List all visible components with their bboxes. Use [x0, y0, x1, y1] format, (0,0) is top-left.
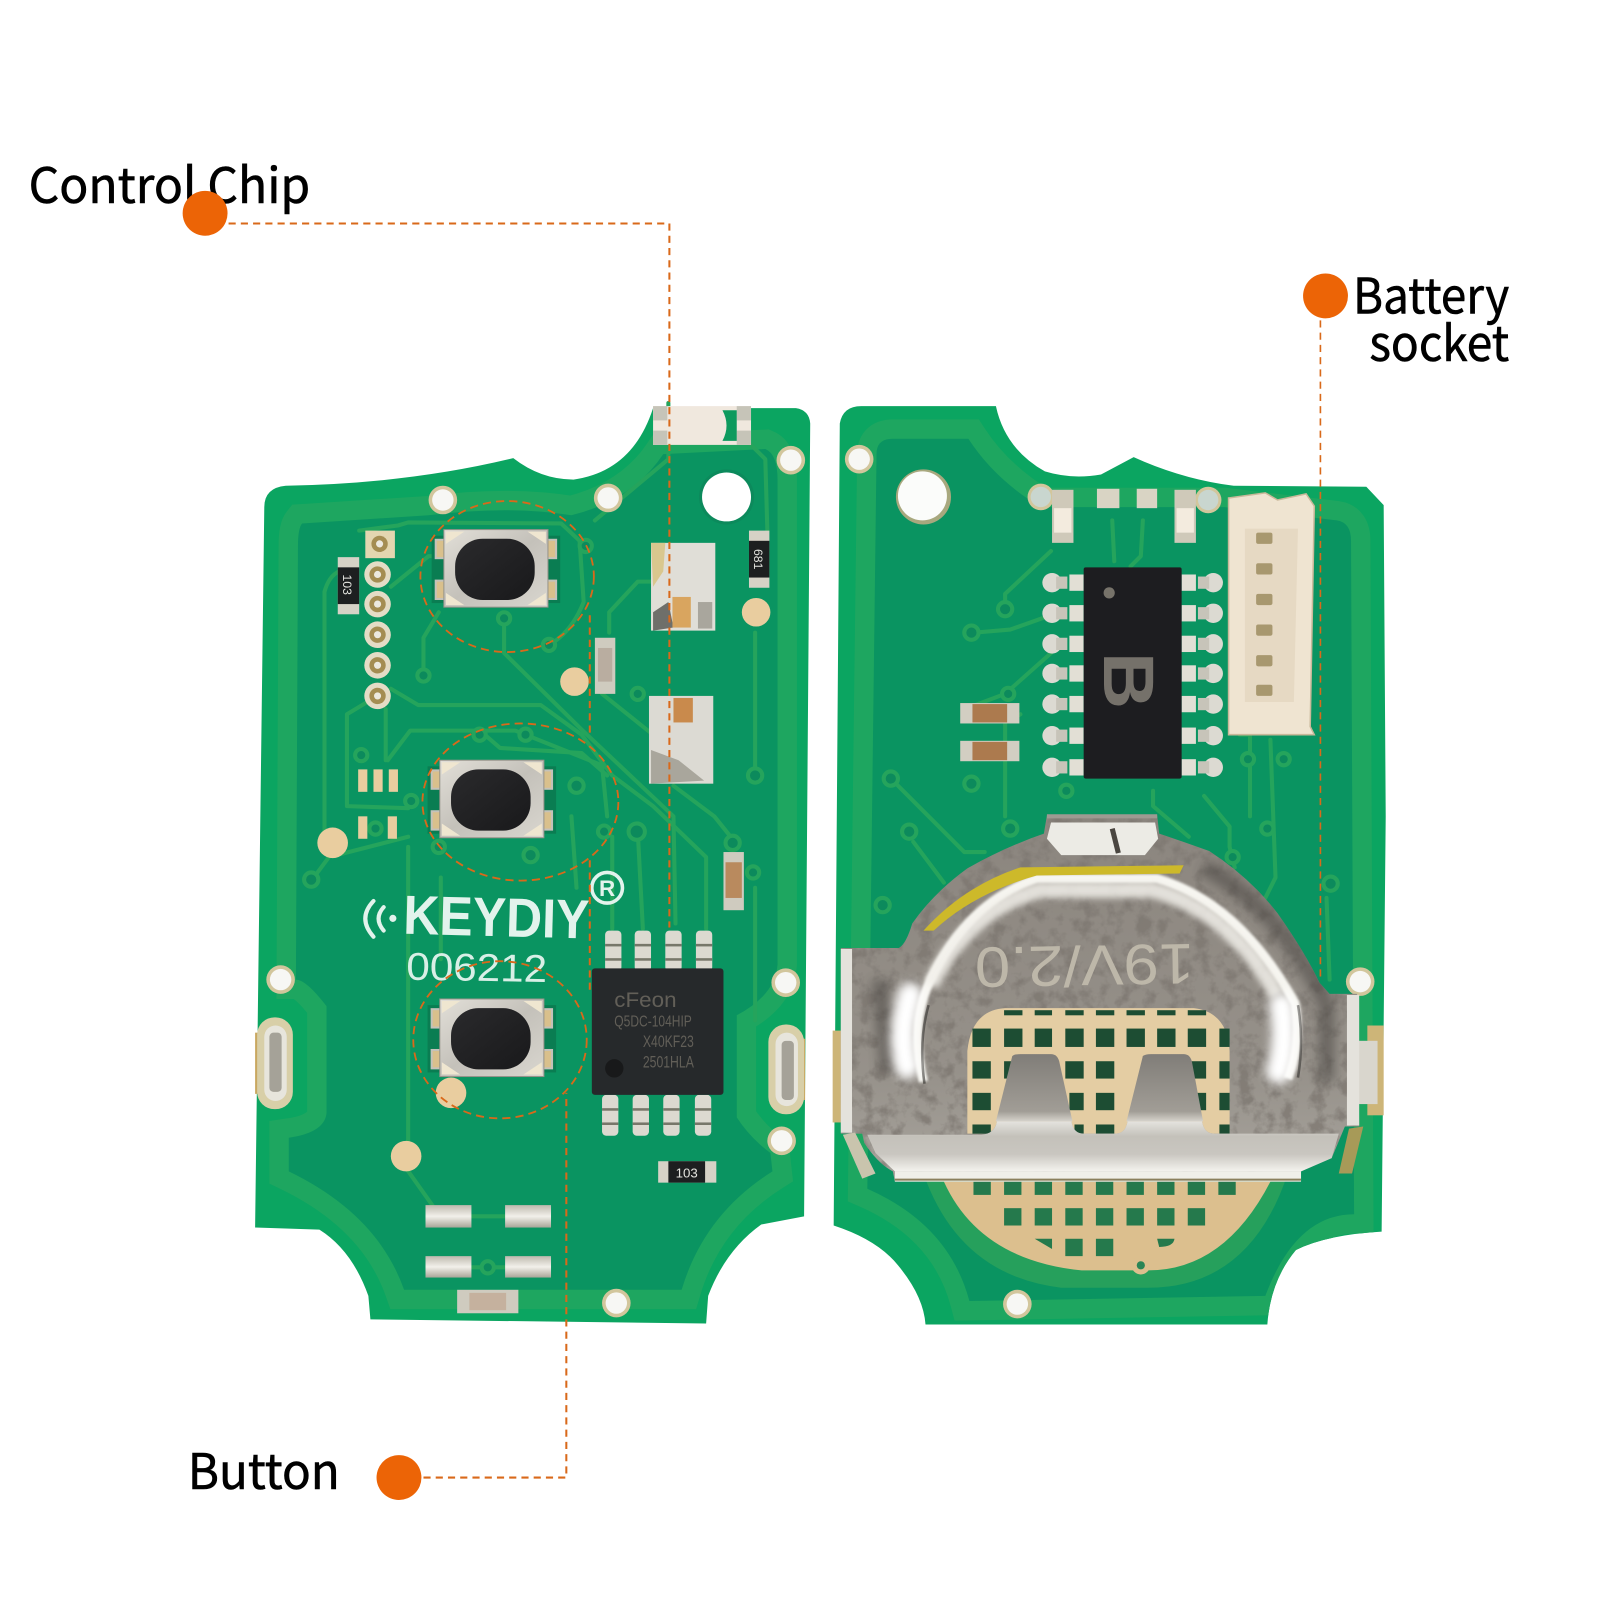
resistor 681: 681 [751, 549, 765, 570]
LED component [653, 406, 751, 445]
part number: 006212 [406, 946, 548, 991]
bottom silver pads [426, 1205, 551, 1278]
resistor 103 horizontal: 103 [676, 1166, 698, 1181]
panel: right circuit board, battery side [833, 406, 1386, 1324]
spring tongues [996, 1054, 1072, 1121]
lug right [768, 1024, 805, 1114]
side tabs [841, 949, 852, 1133]
copper band and inner area left [289, 449, 778, 1290]
solder pads lower [649, 696, 713, 784]
chip B with pins: B [1088, 652, 1168, 709]
battery holder clip [837, 811, 1367, 1184]
label: Battery socket: Battery [1353, 257, 1509, 328]
logo: KEYDIY: KEYDIY [403, 884, 590, 951]
button 3 [428, 999, 556, 1077]
traces right [876, 520, 1338, 980]
resistor 103 vertical: 103 [340, 574, 354, 595]
callout leader: battery socket [1319, 320, 1321, 977]
label: Control Chip: Control Chip [29, 147, 310, 218]
resistor 681 [749, 531, 769, 588]
marker: Battery socket [1303, 273, 1348, 318]
capacitors right [960, 703, 1019, 761]
dark outer band on metal [880, 867, 1327, 1082]
speckled wear on metal [837, 811, 1367, 1184]
callout leader: button [423, 615, 590, 1478]
top tab [1047, 822, 1158, 855]
arch highlight [903, 879, 1301, 1084]
lug left [255, 1017, 293, 1109]
top capacitors and pads [1052, 489, 1196, 543]
panel: left circuit board, button side [255, 403, 810, 1323]
logo: KEYDIY [365, 872, 622, 951]
chip B with pins [1042, 567, 1223, 779]
mounting holes right [845, 445, 1374, 1318]
traces left [304, 403, 767, 1273]
marker: Button [377, 1455, 421, 1500]
label: Battery socket: socket [1369, 305, 1509, 376]
control chip: cFeon [614, 988, 677, 1012]
header pads [364, 531, 395, 709]
label: Button: Button [188, 1433, 340, 1504]
control chip: X40KF23 [643, 1033, 694, 1051]
solder pads upper [651, 543, 715, 631]
gold test pads [317, 598, 770, 1171]
control chip: 2501HLA [643, 1053, 694, 1071]
label: Battery socket [1353, 257, 1509, 376]
resistor 103 horizontal [658, 1161, 716, 1183]
side lugs right board [833, 1026, 1384, 1122]
control chip [592, 931, 723, 1136]
callout leader: button circle outlines [413, 501, 618, 1118]
copper band and inner area right [867, 439, 1354, 1301]
logo: KEYDIY: R [599, 876, 615, 901]
capacitors left [457, 638, 744, 1313]
marker: Control Chip [183, 191, 228, 236]
yellow insulation strip [923, 865, 1184, 931]
mesh window [967, 1008, 1230, 1134]
callout leader: control chip [229, 223, 669, 928]
board outline right [834, 406, 1386, 1324]
control chip: Q5DC-104HIP [614, 1014, 692, 1031]
engraved voltage text: 19V/2.0 [974, 931, 1195, 999]
resistor 103 vertical [338, 557, 359, 614]
metal lower lip [867, 1121, 1339, 1171]
battery socket connector [1229, 493, 1314, 735]
battery contact pad [923, 1173, 1288, 1288]
button 2 [428, 760, 556, 838]
button 1 [432, 530, 560, 607]
board outline left [255, 408, 810, 1323]
mounting holes left [266, 446, 805, 1317]
